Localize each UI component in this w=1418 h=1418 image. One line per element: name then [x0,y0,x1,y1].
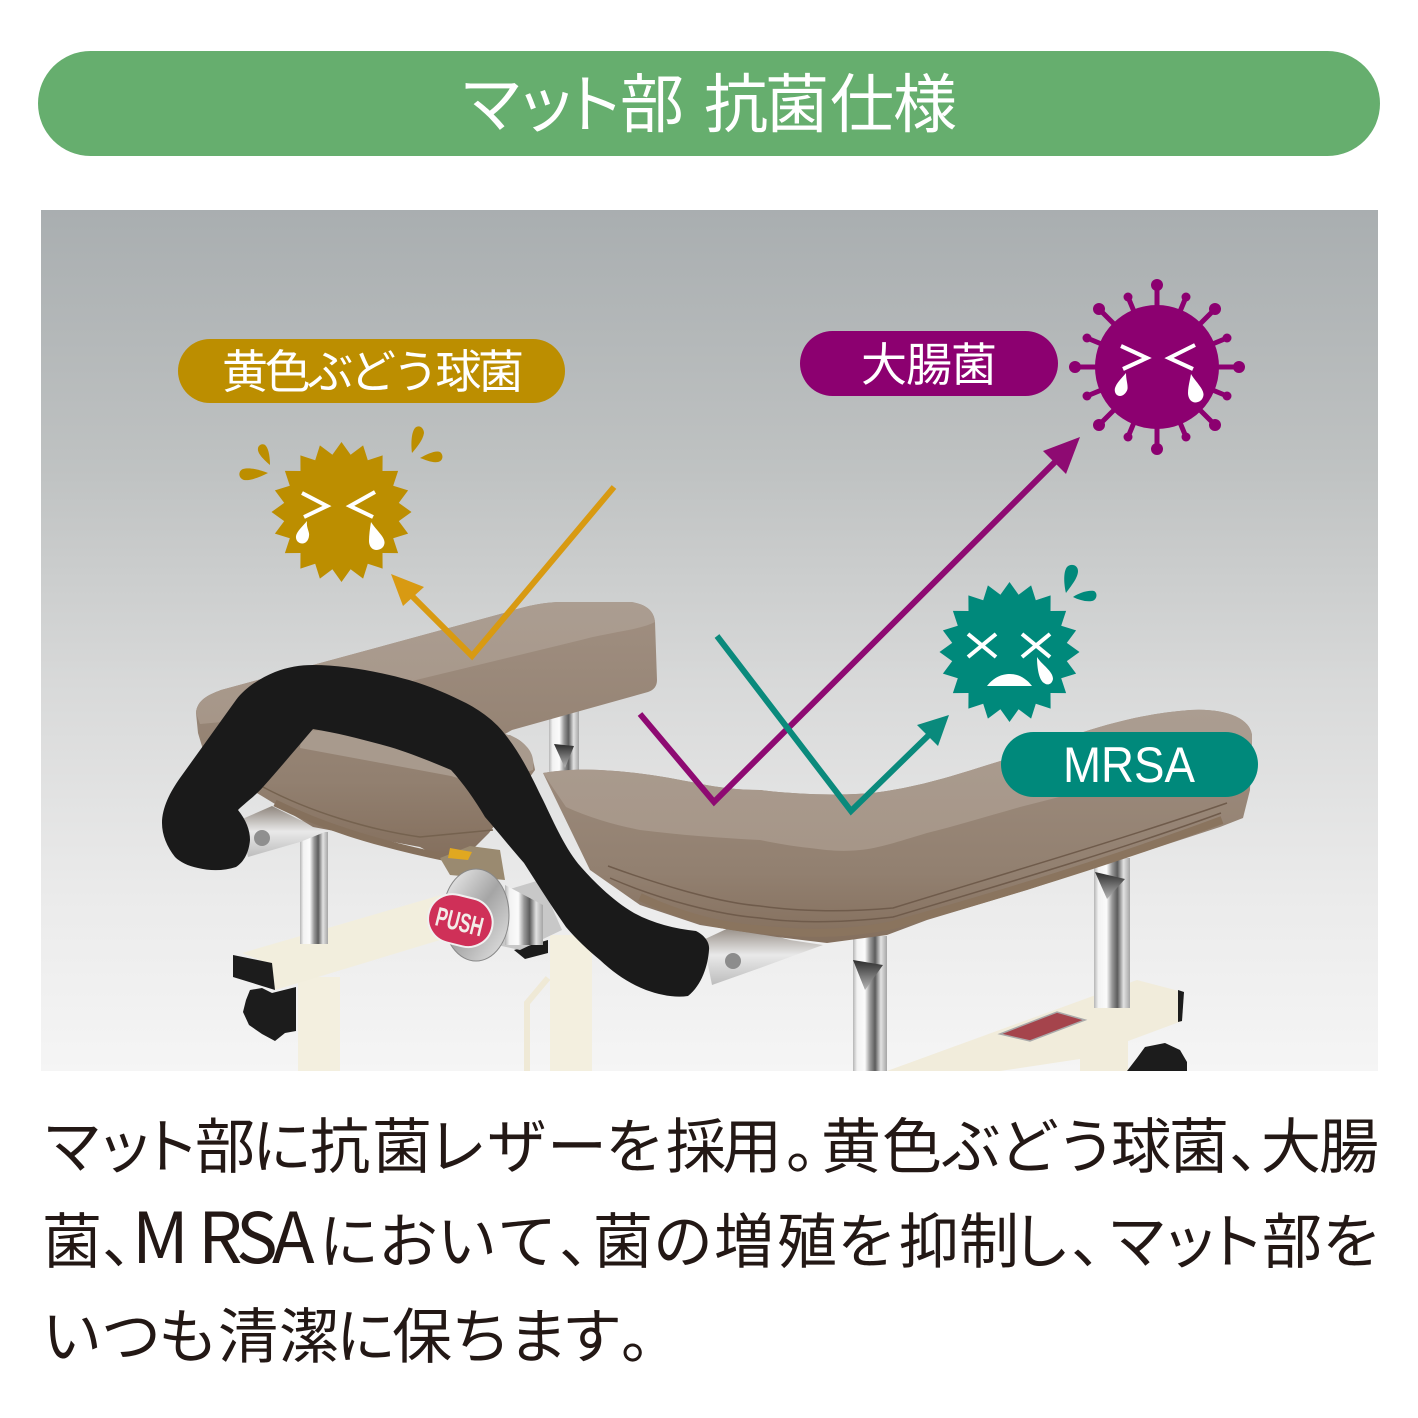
PUSH label: PUSH [433,902,486,942]
icon: MRSA knocked out [940,565,1096,722]
label: staphylococcus: 黄色ぶどう球菌 [222,346,524,398]
red nameplate [1000,1012,1085,1041]
black end cap and knobs [233,940,1187,1071]
label: staphylococcus [178,339,565,403]
cream frame [242,895,1183,1071]
description line 2: MRSA [132,1183,315,1284]
title banner [38,51,1380,156]
walker product illustration [162,602,1252,1071]
description line 2: において、菌の増殖を抑制し、マット部を [319,1209,1382,1276]
description line 1: マット部に抗菌レザーを採用。黄色ぶどう球菌、大腸 [42,1114,1379,1181]
description line 3: いつも清潔に保ちます。 [42,1304,681,1371]
rear mat pad [196,602,657,858]
panel: product photo with bacteria diagram [41,210,1378,1071]
photo background [41,210,1378,1071]
label: e. coli [800,331,1058,396]
title text: マット部抗菌仕様 [459,69,957,141]
arrow: e. coli rebound [640,437,1080,802]
arrow: MRSA rebound [717,636,949,811]
label: MRSA: MRSA [1063,737,1196,793]
description line 2: 菌、 [42,1209,162,1276]
arrow: staphylococcus rebound [391,487,614,656]
front mat pad [543,710,1252,943]
icon: e. coli crying [1069,279,1245,455]
chrome rails [240,806,823,985]
description text [42,1114,1382,1371]
label: e. coli: 大腸菌 [861,339,997,391]
label: MRSA [1001,732,1258,797]
icon: staphylococcus crying [239,426,442,582]
PUSH button assembly [423,846,562,961]
black padded handle [162,665,709,997]
chrome posts [300,708,1130,1071]
